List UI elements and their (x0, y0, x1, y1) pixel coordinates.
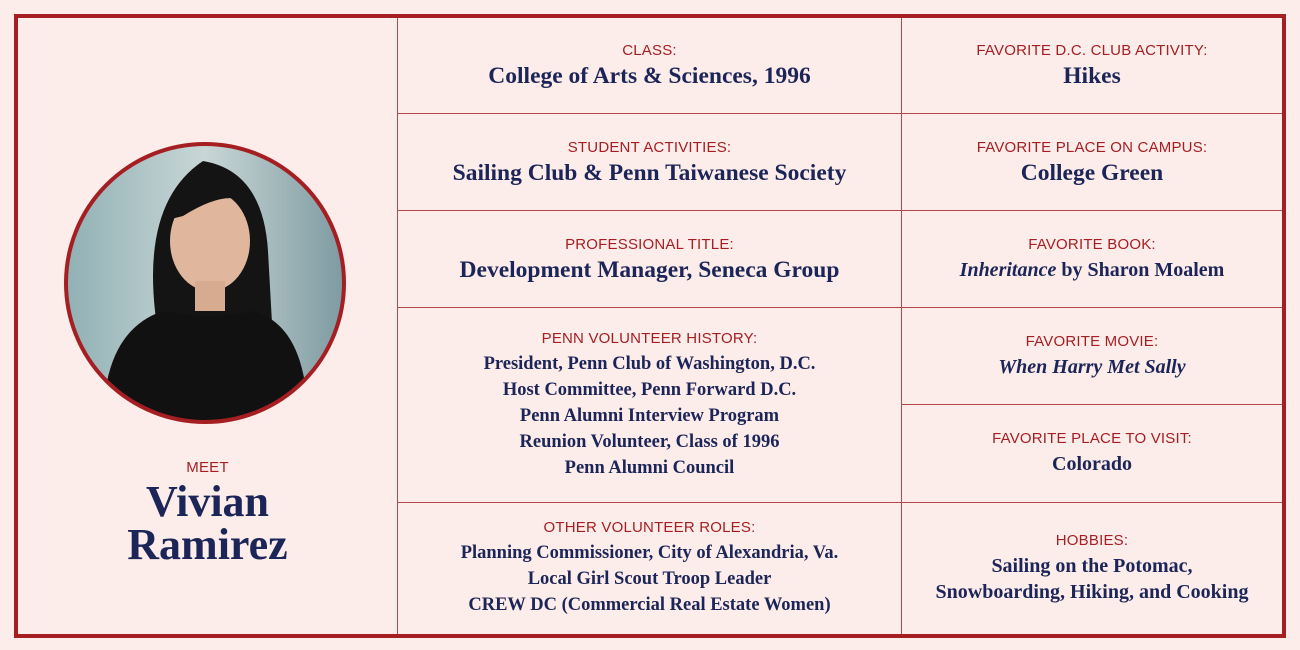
volunteer history: Penn Alumni Council (565, 458, 734, 478)
movie (998, 332, 1186, 378)
volunteer history: President, Penn Club of Washington, D.C. (484, 354, 815, 374)
movie: When Harry Met Sally (998, 356, 1186, 378)
volunteer history: Penn Alumni Interview Program (520, 406, 779, 426)
club activity: Hikes (1063, 63, 1121, 89)
name block (127, 458, 288, 568)
name block: Vivian (146, 476, 269, 526)
club activity (976, 42, 1208, 89)
volunteer history (484, 330, 815, 478)
other roles: CREW DC (Commercial Real Estate Women) (468, 595, 831, 615)
other roles: Planning Commissioner, City of Alexandria, Va. (461, 543, 838, 563)
class (488, 42, 811, 89)
name block: Ramirez (127, 520, 288, 568)
volunteer history: Host Committee, Penn Forward D.C. (503, 380, 796, 400)
campus place: FAVORITE PLACE ON CAMPUS: (977, 138, 1207, 156)
place to visit: Colorado (1052, 453, 1132, 475)
professional title: Development Manager, Seneca Group (460, 256, 839, 282)
name block: MEET (186, 458, 229, 476)
hobbies: HOBBIES: (1056, 532, 1128, 549)
student activities (453, 138, 846, 186)
volunteer history: PENN VOLUNTEER HISTORY: (542, 330, 757, 346)
book: FAVORITE BOOK: (1028, 236, 1156, 252)
place to visit (992, 430, 1192, 475)
movie: FAVORITE MOVIE: (1026, 332, 1158, 350)
professional title: PROFESSIONAL TITLE: (565, 236, 734, 252)
campus place (977, 138, 1207, 186)
student activities: Sailing Club & Penn Taiwanese Society (453, 160, 846, 186)
volunteer history: Reunion Volunteer, Class of 1996 (520, 432, 779, 452)
hobbies: Snowboarding, Hiking, and Cooking (936, 581, 1248, 603)
professional title (460, 236, 839, 282)
other roles (461, 519, 838, 615)
class: College of Arts & Sciences, 1996 (488, 63, 811, 89)
portrait photo (64, 142, 346, 424)
club activity: FAVORITE D.C. CLUB ACTIVITY: (976, 42, 1208, 59)
hobbies: Sailing on the Potomac, (991, 555, 1193, 577)
book: Inheritance by Sharon Moalem (960, 258, 1224, 280)
other roles: OTHER VOLUNTEER ROLES: (544, 519, 755, 536)
class: CLASS: (622, 42, 677, 59)
hobbies (936, 532, 1248, 603)
campus place: College Green (1021, 160, 1163, 186)
book (959, 236, 1224, 280)
student activities: STUDENT ACTIVITIES: (568, 138, 731, 156)
other roles: Local Girl Scout Troop Leader (528, 569, 771, 589)
place to visit: FAVORITE PLACE TO VISIT: (992, 430, 1192, 447)
